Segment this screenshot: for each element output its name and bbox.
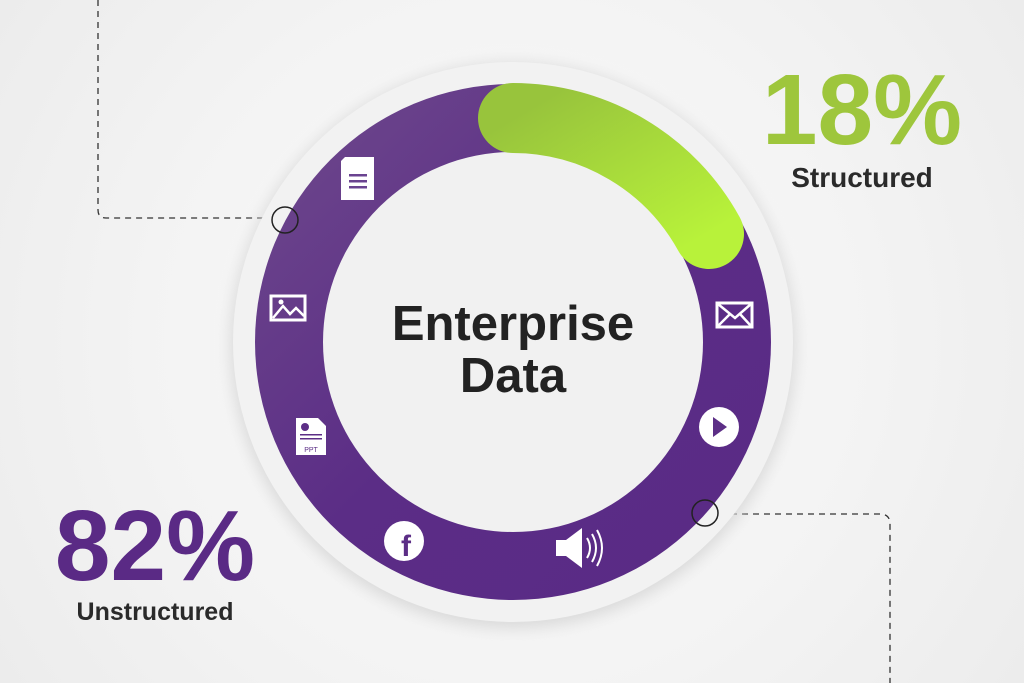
icon: play [699,407,739,447]
icon: speaker [556,528,602,568]
icon: facebook [384,521,424,563]
connector circles [272,207,718,526]
stat: 18% structured: Structured [791,162,933,193]
outer halo disk [231,62,795,628]
center title: Data [460,349,566,403]
center title: Enterprise [392,297,634,351]
icon: image [271,296,305,320]
stat: 82% unstructured: Unstructured [77,598,233,626]
stat: 18% structured: 18% [762,54,962,166]
green arc 18% [513,118,709,234]
center title [392,297,634,403]
icon: mail [717,303,752,327]
dashed connector: bottom-right [720,514,890,683]
icon: document [341,157,374,200]
icon: ppt file: PPT [304,447,319,454]
dashed connector: top-left [98,0,271,218]
icon: ppt file [296,418,326,455]
icon: facebook: f [401,530,412,563]
purple ring [255,84,771,600]
stat: 82% unstructured: 82% [55,490,255,602]
